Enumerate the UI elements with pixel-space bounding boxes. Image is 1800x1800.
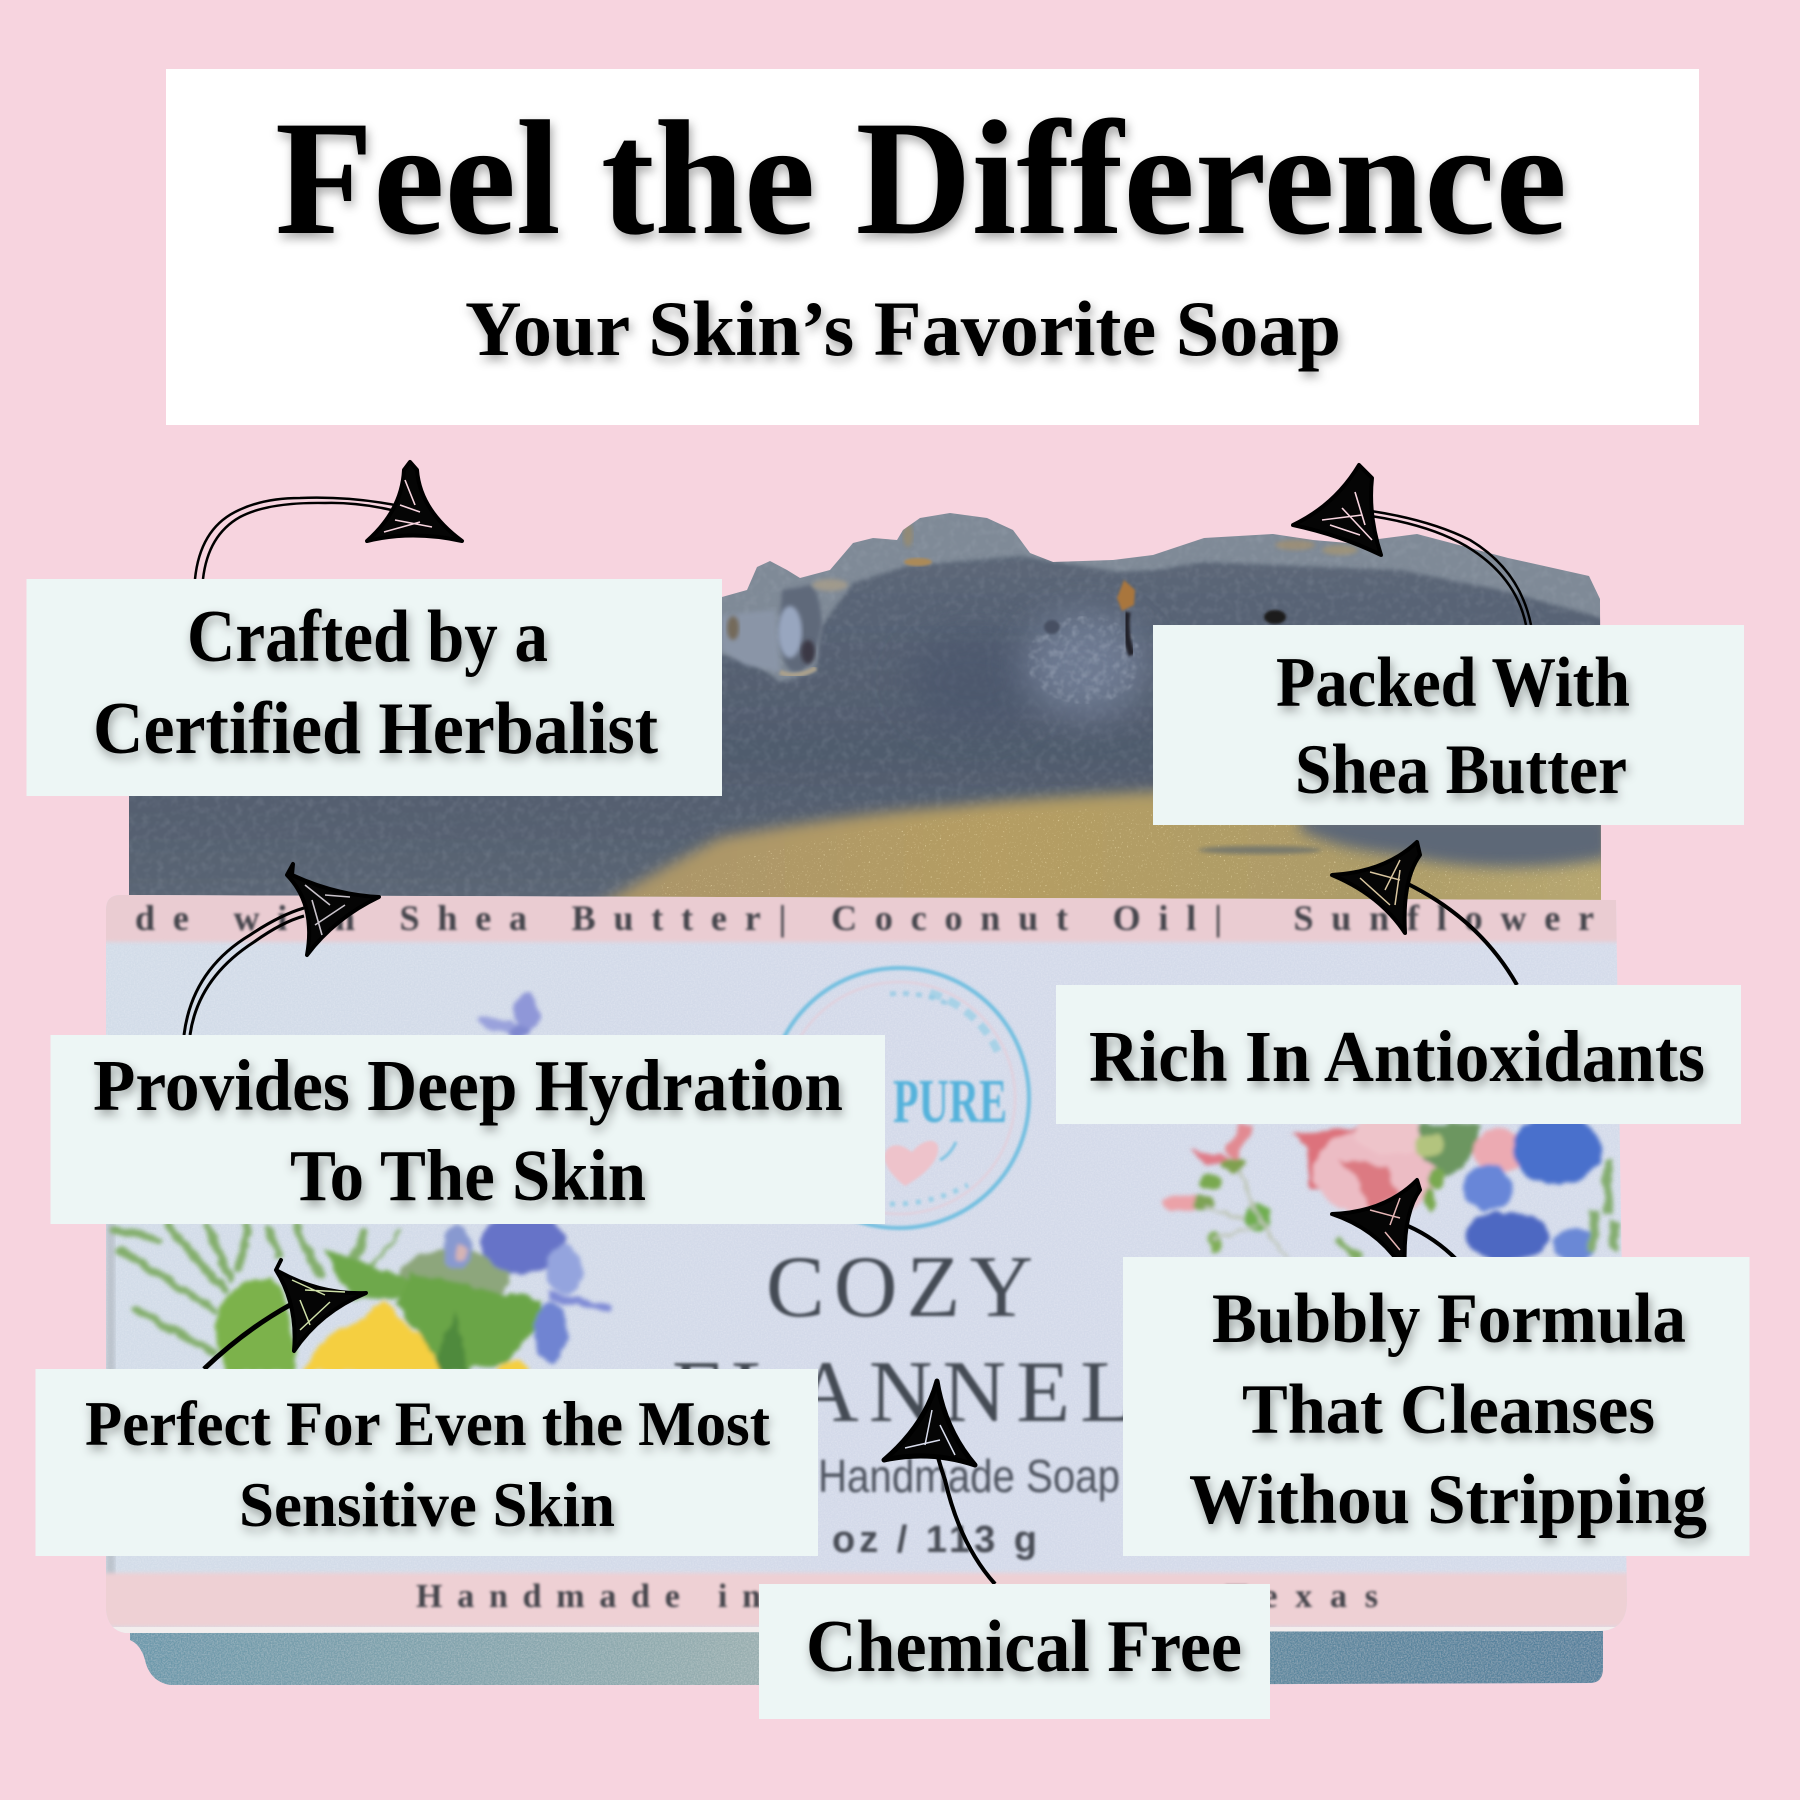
- product type: Handmade Soap: [818, 1450, 1120, 1502]
- arrow: bubbly formula: [1332, 1180, 1457, 1272]
- callout: shea butter: Shea Butter: [1295, 731, 1627, 809]
- header panel: [166, 69, 1699, 425]
- title: Feel the Difference: [275, 88, 1567, 269]
- grey swirl in gold layer: [1300, 815, 1610, 867]
- callout: bubbly formula: That Cleanses: [1242, 1371, 1655, 1449]
- bottom band text right: Texas: [1225, 1578, 1378, 1615]
- arrow: shea butter: [1293, 465, 1531, 625]
- callout: antioxidants: Rich In Antioxidants: [1089, 1016, 1705, 1097]
- callout: herbalist: Crafted by a: [187, 596, 548, 678]
- arrow: sensitive skin: [204, 1260, 366, 1369]
- arrow: antioxidants: [1332, 842, 1517, 985]
- callout: sensitive skin: Sensitive Skin: [239, 1470, 615, 1540]
- callout: shea butter: Packed With: [1276, 644, 1630, 722]
- callout: sensitive skin: Perfect For Even the Most: [85, 1389, 770, 1459]
- soap top charcoal layer: [120, 500, 1620, 920]
- soap body: [120, 556, 1610, 910]
- soap bar photo: [95, 500, 1640, 1685]
- callout: sensitive skin: [36, 1369, 818, 1556]
- grey label edge: [106, 1222, 115, 1582]
- rust fleck and cracks: [1117, 580, 1135, 611]
- soap bottom layer: [130, 1628, 1603, 1685]
- bottom band text: Handmade in: [416, 1578, 761, 1615]
- product name COZY: COZY: [766, 1239, 1033, 1336]
- tan flecks on crust: [1275, 540, 1315, 550]
- callout: antioxidants: [1056, 985, 1741, 1124]
- subtitle: Your Skin’s Favorite Soap: [465, 285, 1341, 372]
- botanical illustration left: [107, 1224, 614, 1369]
- golden soap layer: [598, 783, 1601, 900]
- logo badge: PURE: [893, 1068, 1007, 1136]
- logo badge: [769, 968, 1029, 1228]
- product name FLANNEL: FLANNEL: [672, 1344, 1134, 1441]
- callout: herbalist: [26, 579, 722, 796]
- arrow: crafted: [195, 462, 462, 579]
- callout: hydration: [50, 1035, 885, 1224]
- left purple sprig: [475, 992, 540, 1037]
- paper label: [95, 890, 1640, 1640]
- callout: hydration: To The Skin: [290, 1135, 646, 1216]
- arrow: chemical free: [884, 1381, 995, 1584]
- net weight: oz / 113 g: [832, 1519, 1037, 1561]
- callout: chemical free: Chemical Free: [806, 1606, 1242, 1688]
- callout: bubbly formula: Withou Stripping: [1189, 1461, 1707, 1539]
- arrow: hydration: [184, 864, 379, 1035]
- top band text: de with Shea Butter| Coconut Oil| Sunflower: [135, 898, 1594, 938]
- botanical illustration right: [1163, 1115, 1615, 1261]
- pale left block and notch: [722, 610, 780, 672]
- callout: bubbly formula: [1123, 1257, 1750, 1556]
- top pink band: [95, 890, 1640, 942]
- callout: shea butter: [1153, 625, 1744, 825]
- callout: hydration: Provides Deep Hydration: [93, 1045, 843, 1126]
- callout: chemical free: [759, 1584, 1270, 1719]
- pale flaky patch: [1023, 613, 1147, 717]
- bottom pink band: [95, 1573, 1640, 1627]
- dark patch: [916, 638, 1024, 720]
- callout: bubbly formula: Bubbly Formula: [1212, 1280, 1686, 1358]
- callout: herbalist: Certified Herbalist: [93, 688, 658, 770]
